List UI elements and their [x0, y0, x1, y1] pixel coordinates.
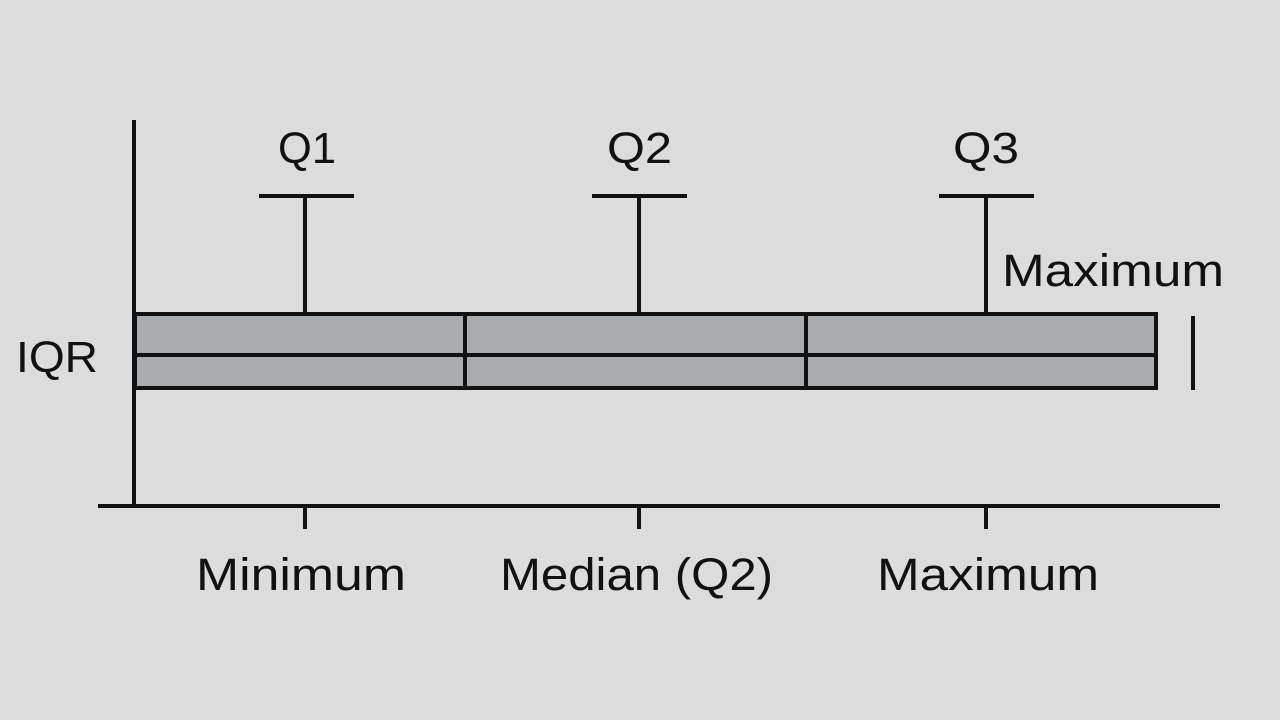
label IQR: IQR: [16, 333, 98, 382]
label Median: Median (Q2): [500, 549, 773, 600]
y axis: [132, 120, 136, 506]
box: [135, 314, 1156, 388]
whisker Q1: [259, 196, 354, 314]
label Maximum bottom: Maximum: [877, 549, 1099, 600]
whisker Q3: [939, 196, 1034, 314]
label Minimum: Minimum: [196, 549, 406, 600]
right marker: [1191, 316, 1195, 390]
whisker Q2: [592, 196, 687, 314]
label Q3: Q3: [953, 124, 1019, 173]
label Maximum top: Maximum: [1002, 245, 1224, 296]
ticks: [305, 506, 986, 529]
label Q2: Q2: [607, 124, 672, 173]
label Q1: Q1: [278, 124, 336, 173]
x axis: [98, 504, 1220, 508]
